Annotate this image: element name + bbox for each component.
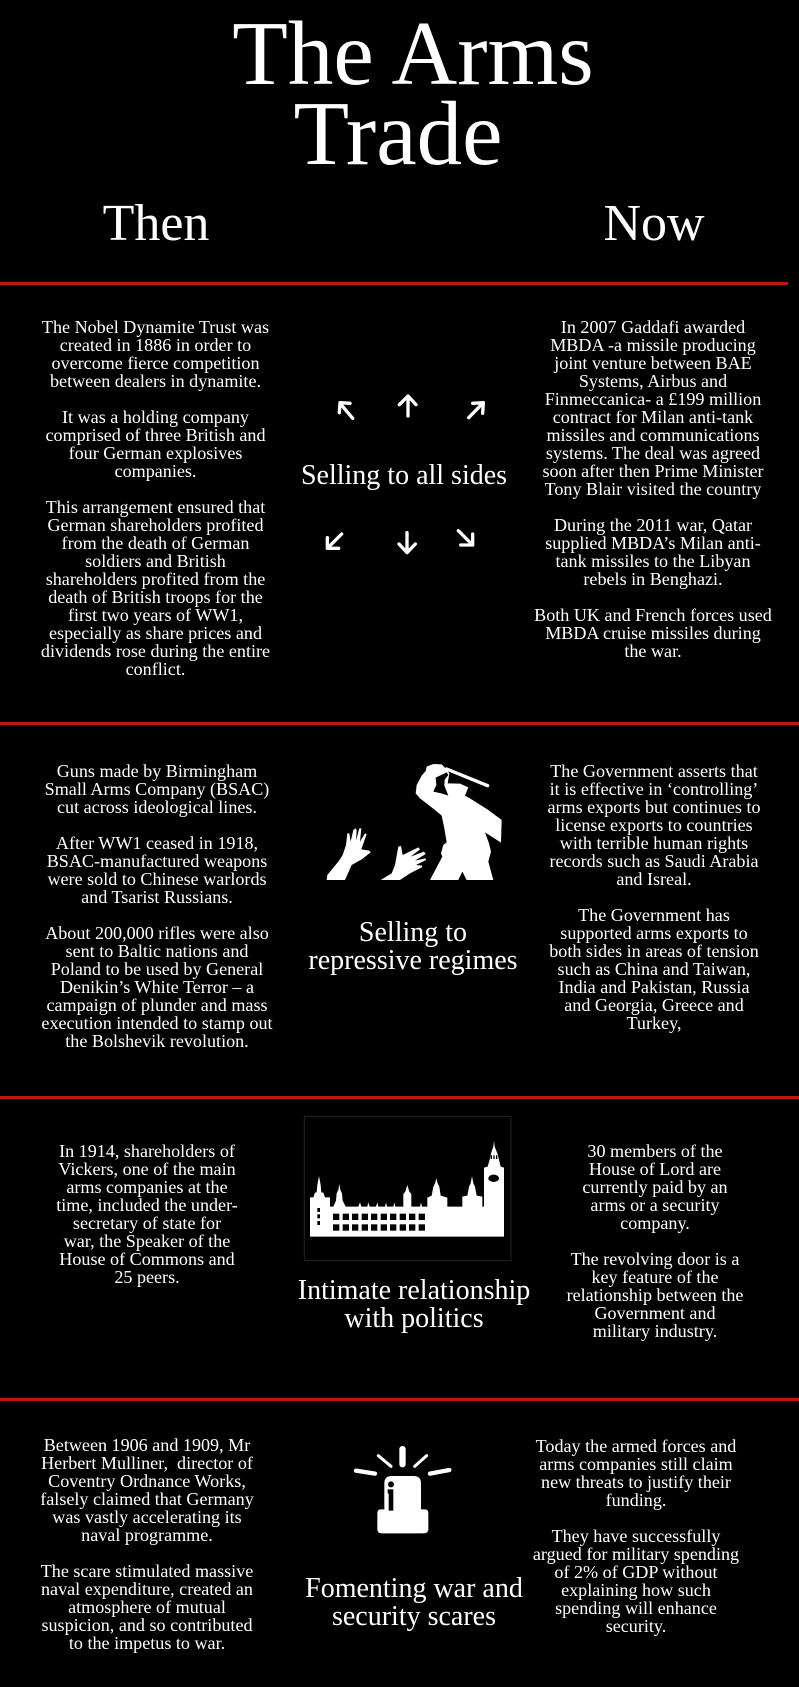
- text: politics now: currently paid by an: [582, 1177, 728, 1197]
- text: selling to all sides then: first two years of WW1,: [68, 605, 243, 625]
- icon: houses of parliament: [304, 1116, 512, 1262]
- text: politics now: Government and: [594, 1303, 716, 1323]
- text: selling to all sides then: death of British troops for the: [48, 587, 263, 607]
- text: politics then: war, the Speaker of the: [64, 1231, 230, 1251]
- text: repressive regimes now: [547, 761, 761, 1033]
- text: repressive regimes now: Turkey,: [627, 1013, 681, 1033]
- text: security scares now: They have successfully: [552, 1526, 720, 1546]
- label: selling to repressive regimes: Selling to: [359, 917, 467, 948]
- text: politics then: time, included the under-: [56, 1195, 238, 1215]
- text: selling to all sides now: Both UK and French forces used: [534, 605, 772, 625]
- text: repressive regimes now: license exports to countries: [555, 815, 753, 835]
- text: security scares then: The scare stimulated massive: [41, 1561, 253, 1581]
- text: selling to all sides then: conflict.: [126, 659, 185, 679]
- text: politics then: 25 peers.: [114, 1267, 180, 1287]
- text: selling to all sides then: dividends rose during the entire: [41, 641, 270, 661]
- label: selling to repressive regimes: repressive regimes: [308, 945, 518, 976]
- text: security scares now: spending will enhance: [555, 1598, 717, 1618]
- text: politics then: arms companies at the: [66, 1177, 228, 1197]
- label: intimate relationship with politics: Intimate relationship: [298, 1275, 530, 1306]
- text: selling to all sides now: In 2007 Gaddafi awarded: [561, 317, 745, 337]
- text: security scares then: naval programme.: [81, 1525, 213, 1545]
- text: security scares now: argued for military spending: [533, 1544, 739, 1564]
- text: repressive regimes now: supported arms exports to: [560, 923, 748, 943]
- text: politics then: Vickers, one of the main: [58, 1159, 236, 1179]
- icon: arrows in all directions: [326, 394, 486, 554]
- text: politics now: military industry.: [593, 1321, 717, 1341]
- text: politics now: key feature of the: [591, 1267, 719, 1287]
- text: selling to all sides then: especially as share prices and: [49, 623, 262, 643]
- text: politics now: House of Lord are: [589, 1159, 721, 1179]
- text: selling to all sides now: During the 2011 war, Qatar: [554, 515, 752, 535]
- label: selling to repressive regimes: [308, 917, 518, 976]
- title: Trade: [294, 83, 502, 184]
- text: repressive regimes then: campaign of plunder and mass: [46, 995, 268, 1015]
- text: repressive regimes now: it is effective in ‘controlling’: [550, 779, 758, 799]
- text: security scares then: was vastly accelerating its: [52, 1507, 242, 1527]
- text: security scares now: funding.: [606, 1490, 666, 1510]
- text: selling to all sides now: Finmeccanica- a £199 million: [545, 389, 761, 409]
- text: selling to all sides then: companies.: [115, 461, 196, 481]
- text: repressive regimes then: cut across ideological lines.: [57, 797, 257, 817]
- text: security scares then: Coventry Ordnance Works,: [48, 1471, 246, 1491]
- text: security scares now: security.: [606, 1616, 666, 1636]
- text: selling to all sides now: contract for Milan anti-tank: [553, 407, 753, 427]
- text: security scares then: naval expenditure, created an: [41, 1579, 253, 1599]
- text: security scares then: [40, 1435, 254, 1653]
- label: fomenting war and security scares: Fomenting war and: [305, 1573, 523, 1604]
- text: repressive regimes now: India and Pakistan, Russia: [559, 977, 749, 997]
- text: repressive regimes now: and Isreal.: [616, 869, 692, 889]
- text: security scares now: explaining how such: [561, 1580, 711, 1600]
- text: selling to all sides now: missiles and communications: [546, 425, 760, 445]
- text: selling to all sides now: systems. The deal was agreed: [546, 443, 760, 463]
- text: security scares then: Herbert Mulliner, director of: [41, 1453, 253, 1473]
- text: selling to all sides now: the war.: [624, 641, 682, 661]
- text: politics then: secretary of state for: [73, 1213, 221, 1233]
- label: fomenting war and security scares: [305, 1573, 523, 1632]
- text: security scares then: atmosphere of mutual: [68, 1597, 226, 1617]
- text: repressive regimes then: Guns made by Birmingham: [57, 761, 257, 781]
- text: selling to all sides then: This arrangement ensured that: [46, 497, 265, 517]
- title: The Arms: [232, 3, 594, 104]
- text: selling to all sides then: [41, 317, 270, 679]
- text: repressive regimes then: After WW1 ceased in 1918,: [56, 833, 258, 853]
- text: security scares now: Today the armed forces and: [536, 1436, 736, 1456]
- text: repressive regimes now: and Georgia, Greece and: [564, 995, 744, 1015]
- text: selling to all sides then: It was a holding company: [62, 407, 249, 427]
- text: selling to all sides now: Systems, Airbus and: [579, 371, 727, 391]
- text: repressive regimes then: execution intended to stamp out: [41, 1013, 273, 1033]
- text: security scares now: [533, 1436, 739, 1636]
- text: selling to all sides then: German shareholders profited: [47, 515, 264, 535]
- text: selling to all sides then: soldiers and British: [85, 551, 226, 571]
- text: repressive regimes then: About 200,000 rifles were also: [45, 923, 269, 943]
- text: repressive regimes then: and Tsarist Russians.: [81, 887, 233, 907]
- text: security scares now: new threats to justify their: [541, 1472, 731, 1492]
- text: politics now: arms or a security: [590, 1195, 720, 1215]
- icon: police officer with baton and raised hands: [326, 764, 502, 880]
- text: repressive regimes then: sent to Baltic nations and: [66, 941, 248, 961]
- heading: then: Then: [103, 195, 209, 252]
- label: intimate relationship with politics: [298, 1275, 530, 1334]
- text: security scares then: falsely claimed that Germany: [40, 1489, 254, 1509]
- text: selling to all sides then: four German explosives: [69, 443, 242, 463]
- text: selling to all sides then: comprised of three British and: [45, 425, 266, 445]
- text: repressive regimes then: [41, 761, 273, 1051]
- text: politics now: The revolving door is a: [571, 1249, 739, 1269]
- text: politics now: relationship between the: [567, 1285, 743, 1305]
- text: politics then: House of Commons and: [59, 1249, 235, 1269]
- text: politics now: 30 members of the: [587, 1141, 723, 1161]
- icon: flashing siren: [354, 1446, 452, 1534]
- title: [232, 3, 594, 184]
- text: repressive regimes then: were sold to Chinese warlords: [47, 869, 267, 889]
- text: politics now: company.: [620, 1213, 690, 1233]
- text: repressive regimes now: arms exports but continues to: [547, 797, 761, 817]
- text: selling to all sides now: tank missiles to the Libyan: [556, 551, 750, 571]
- heading: now: Now: [603, 195, 705, 252]
- text: repressive regimes then: BSAC-manufactured weapons: [47, 851, 267, 871]
- text: selling to all sides then: The Nobel Dynamite Trust was: [42, 317, 269, 337]
- text: repressive regimes now: records such as Saudi Arabia: [549, 851, 759, 871]
- text: selling to all sides then: from the death of German: [62, 533, 249, 553]
- text: politics then: [56, 1141, 238, 1287]
- text: repressive regimes then: the Bolshevik revolution.: [65, 1031, 249, 1051]
- text: selling to all sides now: MBDA cruise missiles during: [545, 623, 761, 643]
- text: repressive regimes now: both sides in areas of tension: [549, 941, 759, 961]
- text: selling to all sides now: MBDA -a missile producing: [550, 335, 756, 355]
- text: selling to all sides then: shareholders profited from the: [46, 569, 265, 589]
- label: selling to all sides: Selling to all sides: [301, 460, 507, 491]
- text: security scares now: of 2% of GDP without: [554, 1562, 718, 1582]
- text: selling to all sides now: joint venture between BAE: [554, 353, 752, 373]
- text: selling to all sides now: rebels in Benghazi.: [583, 569, 723, 589]
- text: security scares then: Between 1906 and 1909, Mr: [44, 1435, 250, 1455]
- text: politics then: In 1914, shareholders of: [59, 1141, 235, 1161]
- text: repressive regimes then: Small Arms Company (BSAC): [45, 779, 269, 799]
- text: security scares then: to the impetus to war.: [69, 1633, 225, 1653]
- text: repressive regimes now: with terrible human rights: [560, 833, 748, 853]
- text: selling to all sides then: created in 1886 in order to: [60, 335, 251, 355]
- text: selling to all sides now: soon after then Prime Minister: [542, 461, 764, 481]
- text: repressive regimes then: Poland to be used by General: [51, 959, 263, 979]
- text: selling to all sides now: supplied MBDA’s Milan anti-: [545, 533, 761, 553]
- label: intimate relationship with politics: with politics: [344, 1303, 484, 1334]
- text: politics now: [566, 1141, 743, 1341]
- text: security scares now: arms companies still claim: [539, 1454, 733, 1474]
- text: security scares then: suspicion, and so contributed: [41, 1615, 253, 1635]
- text: repressive regimes now: The Government asserts that: [550, 761, 758, 781]
- text: repressive regimes now: The Government has: [578, 905, 730, 925]
- text: selling to all sides then: between dealers in dynamite.: [50, 371, 261, 391]
- text: selling to all sides now: [534, 317, 772, 661]
- text: selling to all sides now: Tony Blair visited the country: [545, 479, 761, 499]
- text: repressive regimes now: such as China and Taiwan,: [558, 959, 750, 979]
- text: selling to all sides then: overcome fierce competition: [52, 353, 259, 373]
- text: repressive regimes then: Denikin’s White Terror – a: [60, 977, 254, 997]
- label: fomenting war and security scares: security scares: [332, 1601, 496, 1632]
